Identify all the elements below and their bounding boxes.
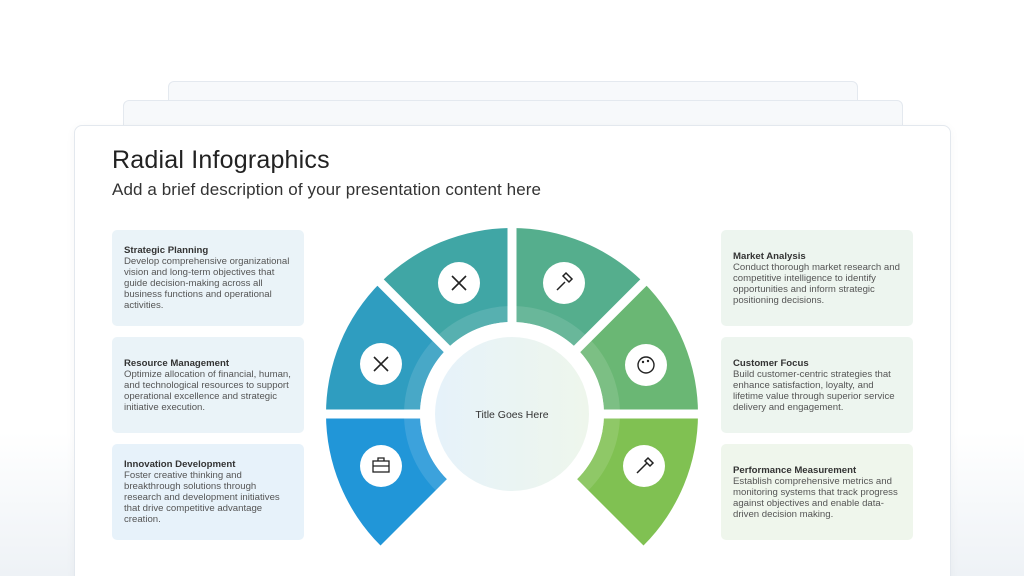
panel: customer focus: enhance satisfaction, loyalty, and <box>733 380 874 390</box>
panel: customer focus <box>721 337 913 433</box>
title: Radial Infographics <box>112 146 330 174</box>
panel: market analysis <box>721 230 913 326</box>
panel: innovation development <box>112 444 304 540</box>
panel: customer focus: delivery and engagement. <box>733 402 843 412</box>
panel: resource management <box>112 337 304 433</box>
panel: performance measurement: against objectives and enable data- <box>733 498 884 508</box>
panel: market analysis: Conduct thorough market research and <box>733 262 900 272</box>
icon: tools <box>360 343 402 385</box>
panel: resource management: Optimize allocation of financial, human, <box>124 368 291 380</box>
panel: market analysis: positioning decisions. <box>733 294 824 306</box>
panel: customer focus: Customer Focus <box>733 358 809 368</box>
panel: performance measurement: Performance Measurement <box>733 464 856 476</box>
panel: strategic planning <box>112 230 304 326</box>
panel: strategic planning: Strategic Planning <box>124 245 208 256</box>
panel: performance measurement: monitoring systems that track progress <box>733 486 898 498</box>
panel: innovation development: that drive competitive advantage <box>124 503 262 514</box>
center circle: Title Goes Here <box>475 409 549 421</box>
panel: innovation development: Innovation Development <box>124 459 235 470</box>
panel: innovation development: breakthrough solutions through <box>124 481 256 492</box>
panel: innovation development: Foster creative thinking and <box>124 470 242 481</box>
back card 2 <box>168 81 858 143</box>
panel: strategic planning: business functions and operational <box>124 289 272 300</box>
panel: performance measurement: driven decision making. <box>733 508 833 520</box>
subtitle: Add a brief description of your presentation content here <box>112 180 541 199</box>
panel: resource management: and technological resources to support <box>124 380 289 390</box>
panel: strategic planning: activities. <box>124 300 163 311</box>
panel: resource management: operational excellence and strategic <box>124 390 277 402</box>
panel: resource management: Resource Management <box>124 358 229 368</box>
icon: briefcase <box>360 445 402 487</box>
icon: palette <box>625 344 667 386</box>
center circle <box>420 322 604 506</box>
icon: pen <box>623 445 665 487</box>
panel: performance measurement <box>721 444 913 540</box>
back card 1 <box>123 100 903 162</box>
panel: resource management: initiative execution. <box>124 402 205 412</box>
panel: market analysis: competitive intelligence to identify <box>733 272 876 284</box>
main card <box>74 125 951 576</box>
panel: innovation development: research and development initiatives <box>124 492 280 503</box>
panel: innovation development: creation. <box>124 514 161 525</box>
panel: performance measurement: Establish comprehensive metrics and <box>733 476 892 486</box>
panel: strategic planning: Develop comprehensive organizational <box>124 256 289 267</box>
panel: market analysis: Market Analysis <box>733 250 806 262</box>
panel: strategic planning: guide decision-making across all <box>124 278 263 289</box>
icon: brush <box>543 262 585 304</box>
panel: customer focus: Build customer-centric strategies that <box>733 368 891 380</box>
panel: strategic planning: vision and long-term objectives that <box>124 267 274 278</box>
panel: market analysis: opportunities and inform strategic <box>733 284 875 294</box>
panel: customer focus: lifetime value through superior service <box>733 390 895 402</box>
segments <box>316 220 708 546</box>
icon: pencil ruler <box>438 262 480 304</box>
